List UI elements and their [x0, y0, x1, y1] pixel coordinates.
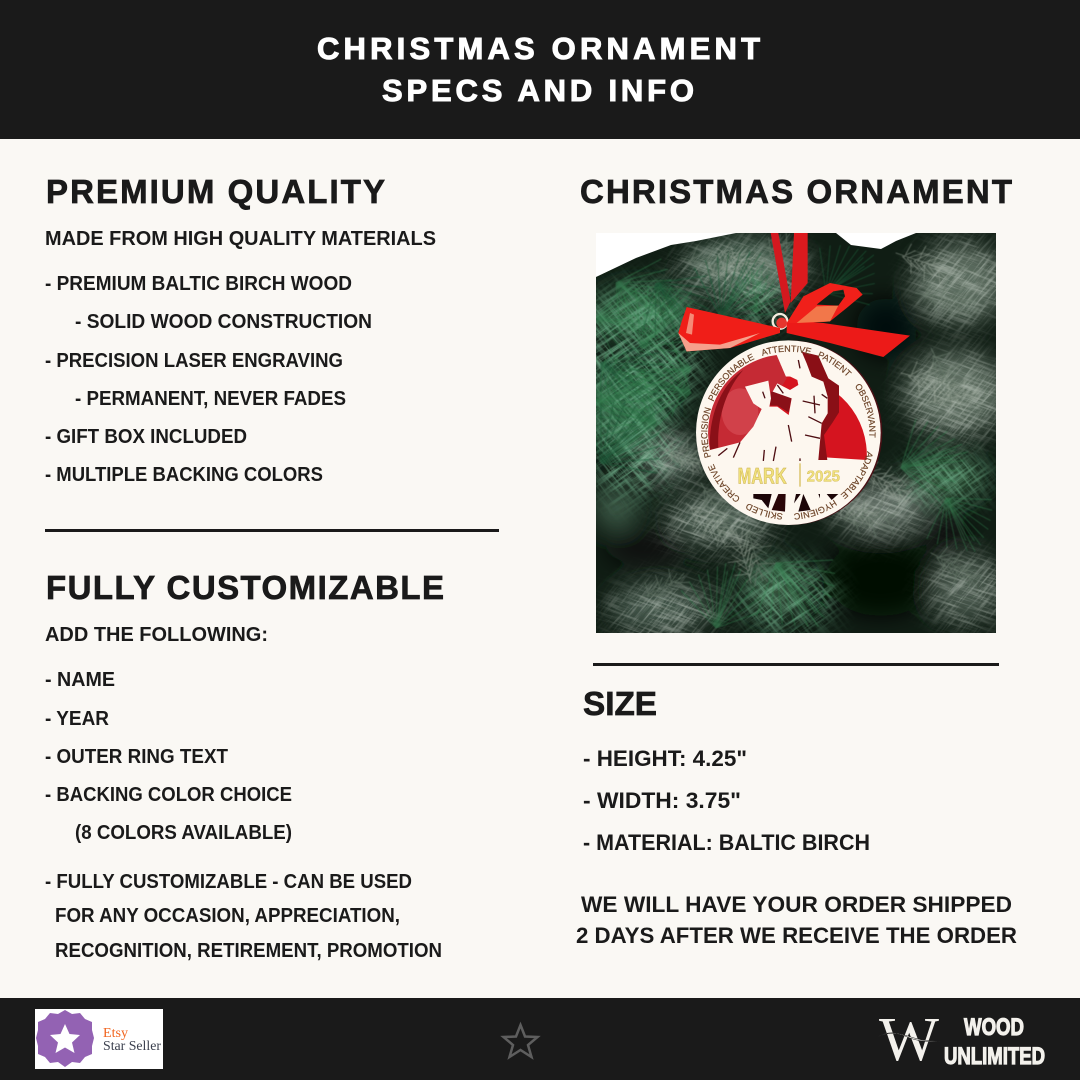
ring text: OBSERVANT	[856, 384, 876, 438]
customization list: - OUTER RING TEXT	[45, 746, 228, 768]
heading: christmas ornament: CHRISTMAS ORNAMENT	[580, 173, 1012, 210]
customization list: - FULLY CUSTOMIZABLE - CAN BE USED	[45, 871, 412, 893]
icon: outline star	[504, 1025, 538, 1057]
icon: serif W monogram: W	[879, 1006, 939, 1074]
ring text: PRECISION	[701, 407, 711, 458]
name and year	[738, 463, 840, 488]
premium quality list: - GIFT BOX INCLUDED	[45, 426, 247, 448]
header band	[0, 0, 1080, 139]
ring text: PERSONABLE	[708, 354, 754, 402]
ring text: ADAPTABLE	[840, 451, 873, 500]
size list: - HEIGHT: 4.25"	[583, 746, 747, 771]
ribbon	[678, 233, 910, 357]
customization list: RECOGNITION, RETIREMENT, PROMOTION	[55, 940, 442, 962]
premium quality list: MADE FROM HIGH QUALITY MATERIALS	[45, 228, 436, 250]
ring text: HYGIENIC	[794, 500, 837, 520]
name and year: 2025	[807, 469, 840, 486]
needle texture	[596, 266, 996, 633]
figure cut lines	[718, 360, 827, 461]
heading: premium quality: PREMIUM QUALITY	[46, 173, 385, 210]
title: CHRISTMAS ORNAMENT	[317, 31, 760, 66]
ring text: SKILLED	[746, 504, 782, 520]
heading: fully customizable: FULLY CUSTOMIZABLE	[46, 569, 444, 606]
badge: etsy star seller: Etsy	[103, 1026, 128, 1041]
customization list: - NAME	[45, 669, 115, 691]
pine needles	[596, 233, 992, 629]
ring text: PATIENT	[818, 351, 852, 376]
customization list: (8 COLORS AVAILABLE)	[75, 822, 292, 844]
premium quality list: - PRECISION LASER ENGRAVING	[45, 350, 343, 372]
customization list: ADD THE FOLLOWING:	[45, 624, 268, 646]
shipping note: WE WILL HAVE YOUR ORDER SHIPPED	[581, 892, 1012, 917]
size list	[583, 746, 870, 855]
shipping note	[576, 892, 1017, 948]
title	[317, 31, 760, 108]
size list: - WIDTH: 3.75"	[583, 788, 741, 813]
title: SPECS AND INFO	[382, 73, 694, 108]
customization list: - BACKING COLOR CHOICE	[45, 784, 292, 806]
logo: wood unlimited	[878, 1006, 1045, 1074]
premium quality list: - SOLID WOOD CONSTRUCTION	[75, 311, 372, 333]
white background above the tree	[596, 233, 736, 277]
size list: - MATERIAL: BALTIC BIRCH	[583, 830, 870, 855]
panel: size	[583, 685, 870, 855]
premium quality list: - MULTIPLE BACKING COLORS	[45, 464, 323, 486]
ring text: ATTENTIVE	[762, 345, 812, 356]
customization list: FOR ANY OCCASION, APPRECIATION,	[55, 905, 400, 927]
customization list	[45, 624, 442, 962]
panel: premium quality	[45, 173, 436, 486]
panel: fully customizable	[45, 569, 444, 962]
icon: purple scalloped star badge	[36, 1010, 94, 1067]
ring text	[701, 345, 876, 520]
heading: size: SIZE	[583, 685, 657, 722]
figures silhouette	[710, 352, 828, 460]
badge: etsy star seller	[35, 1009, 163, 1069]
badge: etsy star seller: Star Seller	[103, 1038, 162, 1053]
ornament	[696, 340, 882, 525]
ring text: CREATIVE	[708, 464, 740, 502]
lower cutouts	[753, 494, 772, 508]
cast shadows	[802, 352, 839, 460]
photo: ornament on pine branches	[596, 233, 996, 633]
premium quality list: - PERMANENT, NEVER FADES	[75, 388, 346, 410]
customization list: - YEAR	[45, 708, 110, 730]
name and year: MARK	[738, 463, 787, 488]
premium quality list	[45, 228, 436, 486]
logo: wood unlimited: WOOD	[964, 1014, 1024, 1041]
logo: wood unlimited: UNLIMITED	[944, 1043, 1045, 1070]
shipping note: 2 DAYS AFTER WE RECEIVE THE ORDER	[576, 923, 1017, 948]
red backing	[710, 377, 867, 460]
footer band	[0, 998, 1080, 1080]
premium quality list: - PREMIUM BALTIC BIRCH WOOD	[45, 273, 352, 295]
